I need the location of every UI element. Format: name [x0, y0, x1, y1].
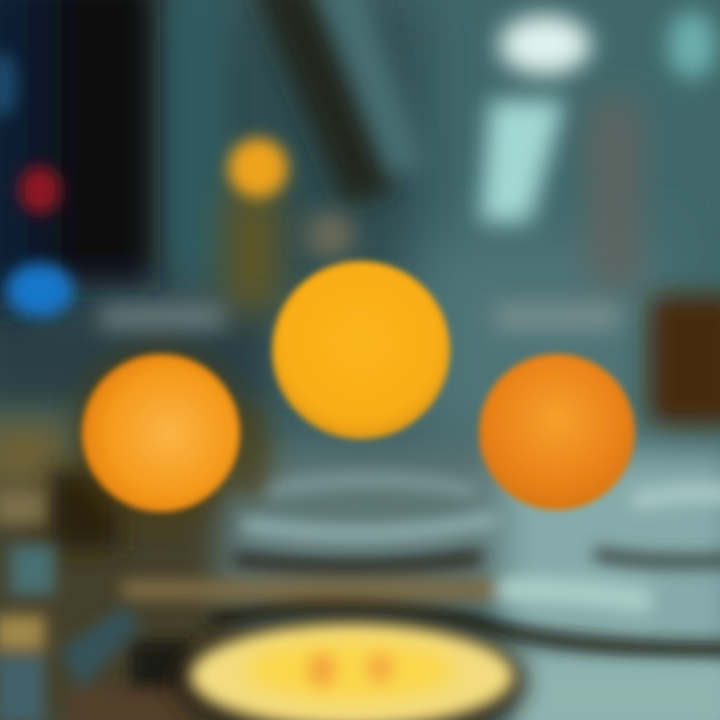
small distant orange sphere — [225, 138, 288, 310]
glass rims — [100, 211, 620, 329]
ripple stripes — [130, 480, 720, 650]
lower floor base — [0, 420, 720, 720]
white ceiling light — [499, 15, 591, 75]
red indicator — [19, 166, 61, 214]
brown container right — [650, 295, 720, 425]
right dim column — [590, 100, 640, 290]
centre orange sphere — [272, 261, 450, 439]
dark left panel — [0, 0, 160, 310]
right orange sphere — [479, 354, 635, 510]
blue glow far left — [0, 51, 17, 119]
left orange sphere — [82, 354, 240, 512]
glowing yellow dish — [174, 616, 526, 720]
blue indicator — [6, 263, 74, 317]
bottom right floor — [520, 665, 720, 720]
pale teal light strip — [480, 100, 565, 222]
sphere halo shadows — [72, 348, 272, 524]
pale diagonal beam — [315, 0, 425, 175]
teal upper-right light — [668, 11, 716, 79]
vertical teal column — [170, 0, 225, 270]
dark diagonal beam — [250, 0, 395, 205]
left foreground blocks — [0, 490, 190, 720]
